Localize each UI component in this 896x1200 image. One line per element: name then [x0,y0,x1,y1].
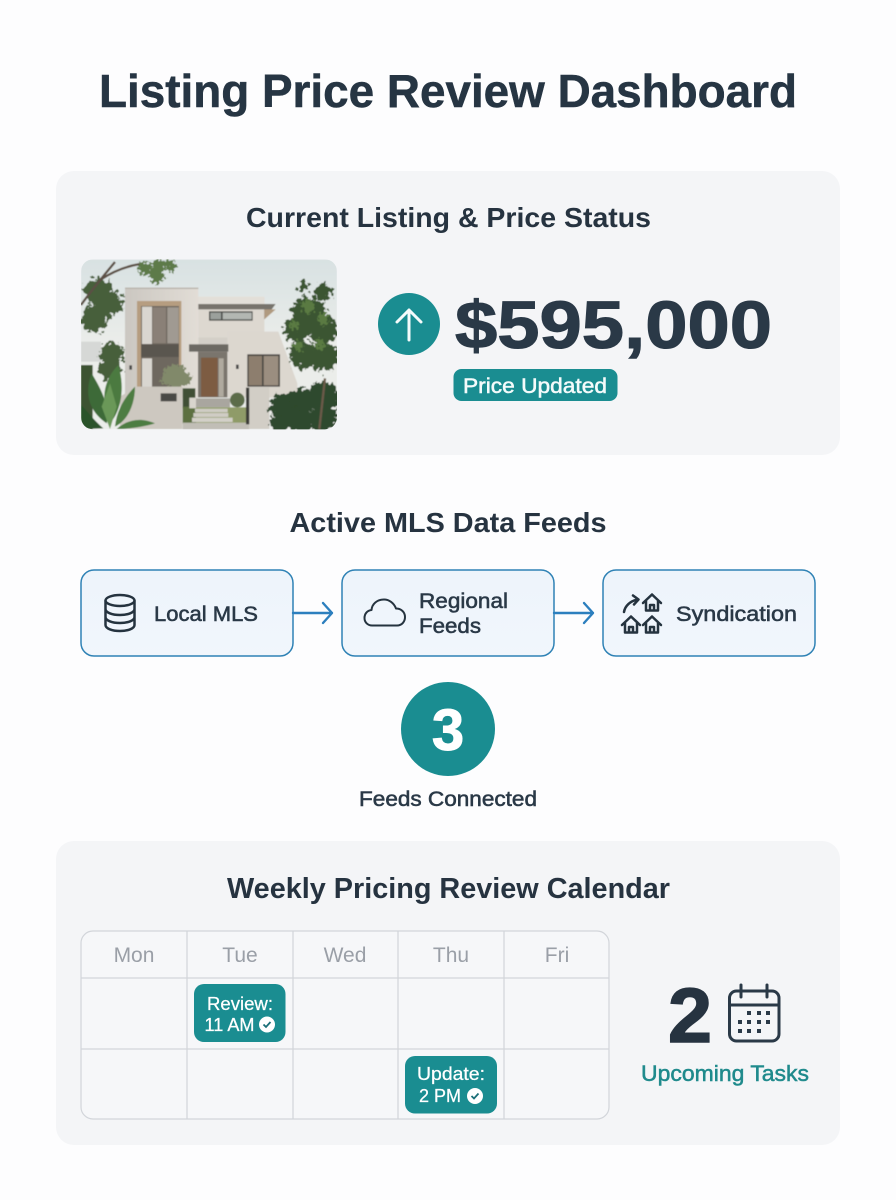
price: $595,000 [455,288,772,363]
palm leaves [81,365,155,429]
left tree [81,278,123,380]
event: update 2 PM: Update: [417,1064,485,1084]
feeds connected counter [359,682,537,811]
feed card: syndication: Syndication [676,602,797,626]
label: regional feeds [419,589,508,638]
badge: price updated [454,369,618,401]
event: update 2 PM [405,1056,497,1114]
feed card: regional feeds [342,570,554,656]
right tree and hedge [284,281,338,371]
icon: houses with share arrow [622,594,661,632]
heading: active MLS data feeds: Active MLS Data Feeds [290,507,606,538]
house photo illustration [81,258,339,433]
weekday headers [114,944,569,967]
calendar grid [81,931,609,1119]
icon: up arrow circle [378,293,440,355]
icon: database [106,595,134,631]
upcoming tasks counter: Upcoming Tasks [641,1061,809,1086]
feeds connected counter: 3 [432,698,464,763]
house [125,288,198,398]
label: regional feeds: Feeds [419,614,481,638]
weekday headers: Fri [545,944,569,967]
upcoming tasks counter [641,973,809,1086]
event: update 2 PM: 2 PM [419,1086,461,1106]
panel: weekly pricing review calendar [56,841,840,1145]
panel: current listing and price status [56,171,840,455]
label: regional feeds: Regional [419,589,508,613]
weekday headers: Tue [222,944,258,967]
upcoming tasks counter: 2 [668,973,712,1059]
arrow: regional to syndication [554,603,593,623]
event: review 11 AM: Review: [207,994,273,1014]
badge: price updated: Price Updated [463,375,607,398]
heading: current listing: Current Listing & Price Status [246,202,651,233]
icon: calendar [730,985,779,1041]
title: Listing Price Review Dashboard [99,65,797,117]
weekday headers: Thu [433,944,469,967]
feed card: local MLS [81,570,293,656]
feed card: local MLS: Local MLS [154,602,258,626]
feeds connected counter: Feeds Connected [359,788,537,811]
event: review 11 AM: 11 AM [204,1015,254,1035]
weekday headers: Wed [324,944,366,967]
heading: weekly calendar: Weekly Pricing Review Calendar [227,873,670,905]
icon: cloud [364,600,405,626]
event: review 11 AM [194,984,286,1042]
feed card: syndication [603,570,815,656]
arrow: local to regional [293,603,332,623]
weekday headers: Mon [114,944,154,967]
